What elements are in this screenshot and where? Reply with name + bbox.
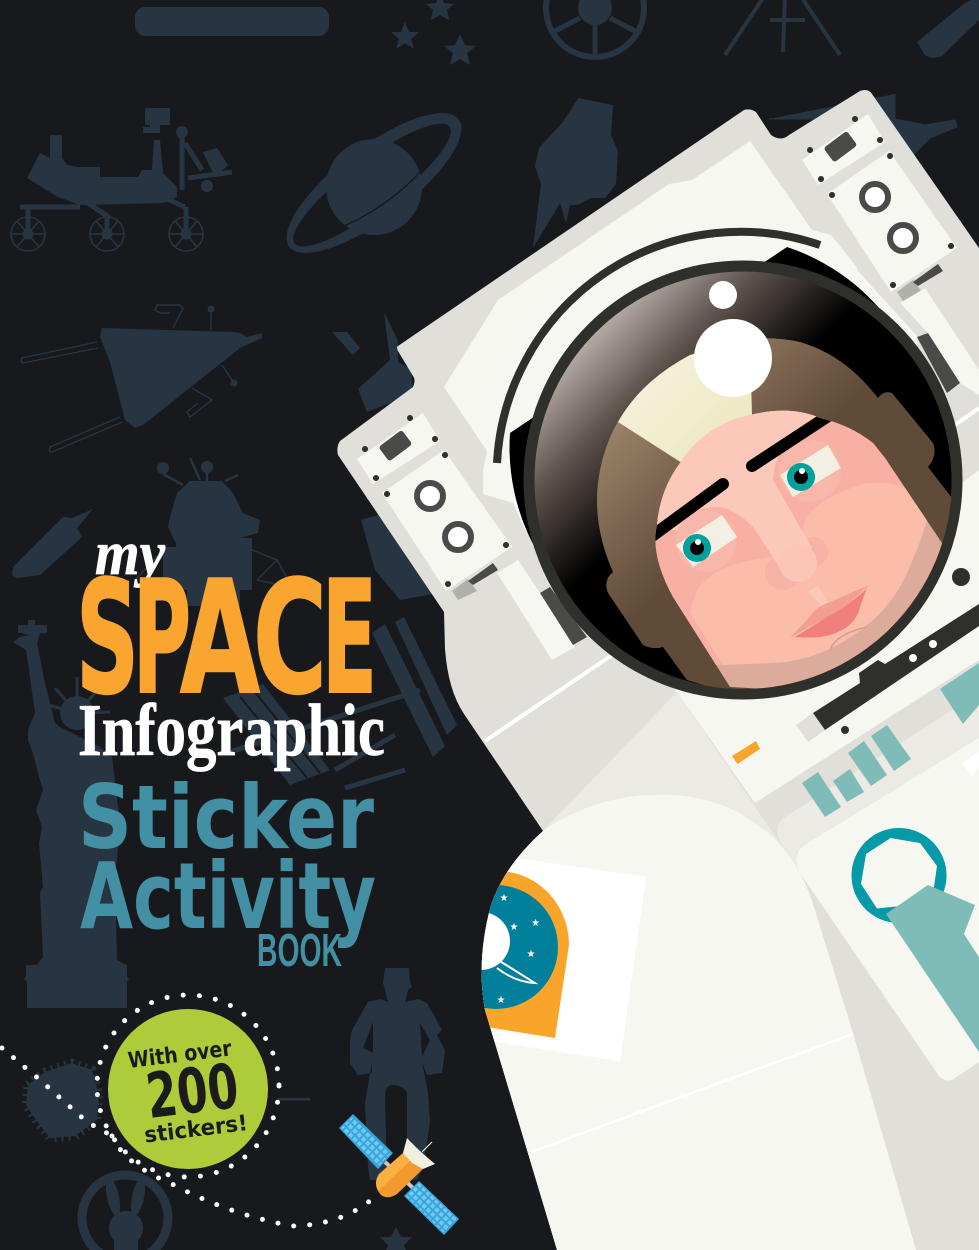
rivets [807,116,954,288]
patch stars: ★ [531,918,540,929]
title word: BOOK: BOOK [257,924,342,976]
visor glass [529,266,957,694]
silhouette: statue of liberty [13,620,129,1008]
white chest tag [962,752,979,776]
silhouette: splat [26,1063,99,1138]
teal tab [886,885,979,1052]
silhouette: spacecraft fragments [332,312,413,412]
patch stars: ★ [527,949,536,960]
badge text: With over [127,1036,233,1074]
silhouette: moon lander [135,458,290,606]
silhouette: stars [391,0,476,65]
orange tick [732,741,760,764]
panel lower plate [827,151,957,292]
upper strap [900,288,979,395]
right nostril [807,537,828,566]
title word: SPACE: E [322,547,377,729]
patch stars: ★ [510,922,519,933]
green circle [108,1009,268,1169]
upper backpack panel [802,114,957,301]
lower strap block [540,587,587,645]
rivets [362,415,509,587]
lower lip [795,588,867,638]
bar 4 [871,725,911,771]
badge text [127,1036,249,1149]
control slot [813,604,979,730]
title word: Sticker: Sticker [78,766,375,869]
title word: SPACE [76,547,377,729]
silhouette: space station [223,617,457,788]
white planet [482,913,510,970]
white sticker [470,858,646,1061]
upper lip [790,585,870,638]
helmet arc [497,232,820,463]
small dot [841,726,849,734]
panel top plate [802,114,885,185]
title word: SPACE: C [253,547,327,729]
badge text: 200 [142,1049,242,1133]
patch stars: ★ [497,995,506,1006]
slot lights [909,640,937,662]
silhouette: frankenstein figure [350,968,445,1180]
silhouette: small dash [278,1098,310,1100]
dotted orbit trail [2,995,371,1226]
silhouette: lander behind suit [769,94,957,155]
black helmet liner [510,247,932,658]
latch bar [913,264,943,286]
arm seam [531,1034,853,1152]
title word: SPACE: S [76,547,139,729]
white collar [444,141,918,600]
dial dot [952,568,970,586]
orange badge [482,872,569,1038]
silhouette: rover [11,108,232,251]
silhouette: wheel [546,0,644,57]
bar 1 [802,772,841,817]
mission patch [482,858,646,1061]
astronaut [337,90,979,1250]
latch bar [468,563,498,585]
cheeks [690,482,927,665]
bar 3 [848,741,887,786]
teal level bars [802,663,979,817]
forehead [656,410,828,530]
lower chest panel [796,738,979,1080]
rings [417,483,443,509]
silhouette: bottom star [380,1227,412,1250]
panel top plate [357,413,440,484]
rings [862,184,888,210]
silhouette: saturn [268,90,480,276]
lower backpack panel [357,413,512,600]
planet ring [497,960,535,983]
left eyebrow [640,484,723,545]
silhouette: tripod [725,0,840,55]
icon: satellite [340,1115,458,1234]
nose bridge [753,480,812,568]
face in visor [597,281,970,700]
right pupil [794,470,808,484]
silhouette: splat behind collar [361,510,433,600]
skin shade [655,410,910,665]
sticker count badge [108,1009,268,1169]
left glint [695,539,701,545]
right eyebrow [746,416,832,472]
sleeve arm [482,794,916,1250]
orbit ring [97,995,279,1177]
title word: Infographic: Infographic [78,690,385,772]
silhouette: top right capsule [917,0,979,58]
left nostril [765,558,798,590]
jaw shadow [655,410,942,688]
upper strap block [917,333,960,393]
screen [378,430,412,462]
title word: SPACE: A [180,547,260,729]
face [655,410,942,688]
silhouette: rocket [12,509,93,578]
moon highlight small [709,281,737,309]
right solar panel [405,1182,458,1234]
left solar panel [340,1115,392,1168]
slot patch [796,713,825,742]
blue disc [482,885,558,1009]
left socket [680,519,686,526]
moon highlight large [694,319,772,397]
right stripe [955,408,979,425]
chest [650,470,979,803]
silhouette: top bar [135,7,329,36]
philtrum [808,585,828,606]
latch [897,280,922,301]
light 1 [909,654,917,662]
left pupil [690,541,704,555]
orbit tail left [2,1048,112,1136]
patch stars: ★ [500,893,509,904]
silhouette: ape astronaut [533,98,618,248]
light 2 [929,640,937,648]
title word: Activity: Activity [80,843,376,950]
panel lower plate [382,450,512,591]
badge text: stickers! [143,1111,249,1149]
satellite dish [403,1138,435,1169]
bar 2 [833,769,864,802]
screen [823,131,857,163]
satellite boom [385,1162,413,1188]
chest shadow [543,692,798,870]
suit base [337,90,979,1250]
left eye white [676,515,737,567]
hair [597,338,960,690]
shoulder stripe [485,655,612,741]
satellite body [376,1153,425,1197]
right glint [799,468,805,474]
nose tip [780,549,817,582]
antenna [422,1142,432,1152]
left iris [683,534,711,562]
blonde streak [618,354,752,462]
title block [76,520,385,976]
latch [452,579,477,600]
right iris [787,463,815,491]
smile line [830,627,867,650]
silhouette: lander probe [21,305,262,452]
lower strap [497,560,575,660]
right eye white [780,445,841,497]
title word: my: my [95,520,165,588]
teal ring [852,828,947,923]
lower chest panel rim [777,693,979,868]
title word: SPACE: P [133,547,191,729]
top bar [940,663,979,724]
right socket [779,440,841,502]
silhouette: rabbit medallion [82,1175,168,1250]
orbit tail right [112,1136,371,1226]
